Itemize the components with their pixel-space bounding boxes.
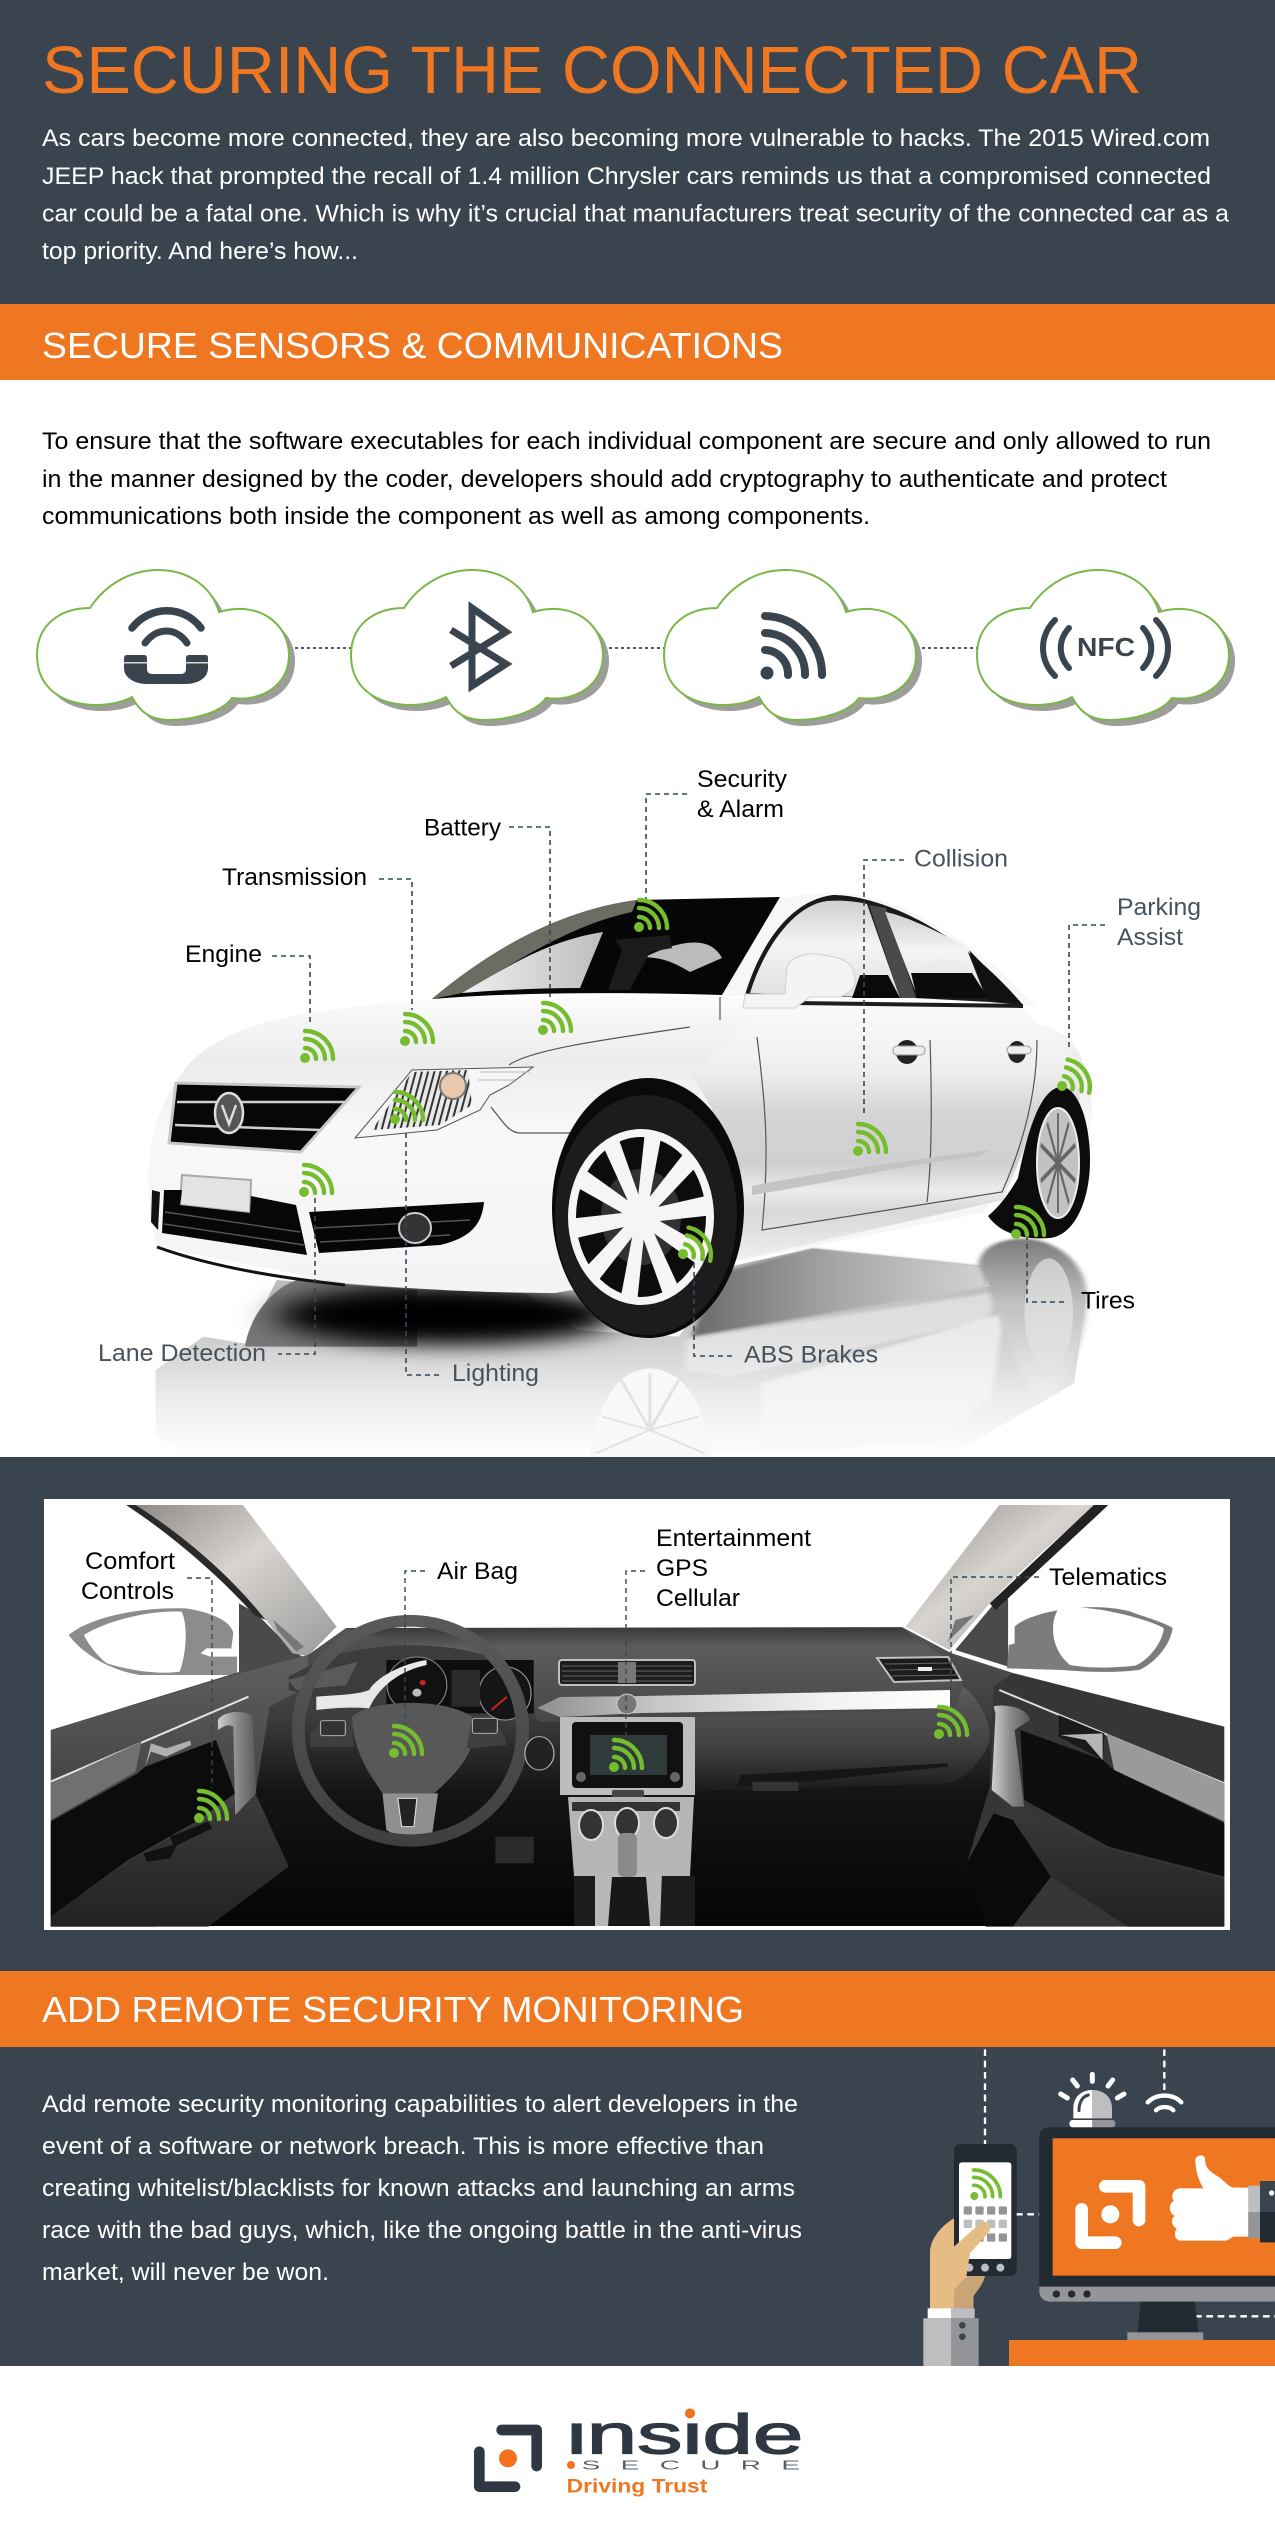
- car labels: Lighting: [452, 1360, 539, 1387]
- cloud: NFC: [977, 570, 1235, 726]
- front side window: [750, 901, 900, 998]
- icon: parking assist sensor: [1056, 1059, 1095, 1097]
- right vent: [877, 1657, 961, 1682]
- icon: battery sensor: [538, 1003, 571, 1035]
- center console: [560, 1717, 695, 1798]
- dashboard lower: [695, 1687, 990, 1792]
- right pillar and mirror: [906, 1505, 1173, 1672]
- icon: telematics sensor: [934, 1707, 967, 1739]
- cloud connectors: [289, 647, 977, 649]
- car labels: ABS Brakes: [744, 1342, 878, 1368]
- monitoring paragraph: Add remote security monitoring capabilities to alert developers in the: [42, 2091, 798, 2118]
- car labels: Lane Detection: [98, 1340, 266, 1367]
- grille: [169, 1083, 359, 1152]
- sensors paragraph: in the manner designed by the coder, developers should add cryptography to authenticate and protect: [42, 466, 1167, 493]
- car callouts: leader lines: [272, 794, 1105, 1375]
- left door: [51, 1655, 308, 1927]
- intro text block: top priority. And here’s how...: [42, 238, 358, 265]
- title: SECURING THE CONNECTED CAR: [42, 34, 1142, 108]
- dashed connections: [985, 2049, 1275, 2316]
- sensors paragraph: To ensure that the software executables for each individual component are secure and only allowed to run: [42, 428, 1211, 455]
- car labels: [98, 766, 1201, 1387]
- monitoring paragraph: [42, 2091, 802, 2286]
- lower grille right with fog light: [309, 1202, 484, 1253]
- illustration: remote monitoring: [923, 2049, 1275, 2366]
- car labels: Security: [697, 766, 787, 793]
- left pillar and mirror: [69, 1505, 337, 1677]
- center vent: [559, 1660, 695, 1685]
- car photo illustration: [148, 893, 1092, 1457]
- side window frame: [745, 895, 1023, 1005]
- interior labels: Cellular: [656, 1585, 740, 1612]
- interior labels: Comfort: [85, 1548, 175, 1575]
- window sill: [795, 1003, 1023, 1006]
- icon: telephone: [124, 611, 208, 684]
- number plate: [180, 1175, 251, 1213]
- door handles: [893, 1040, 1031, 1064]
- monitoring paragraph: market, will never be won.: [42, 2259, 329, 2286]
- rear side window: [885, 912, 986, 998]
- icon: security sensor: [634, 900, 667, 932]
- car labels: Transmission: [222, 864, 367, 891]
- side mirror: [743, 954, 855, 1008]
- section banner: secure sensors: SECURE SENSORS & COMMUNICATIONS: [42, 325, 783, 366]
- rear wheel: [988, 1087, 1090, 1238]
- monitor: [1039, 2127, 1275, 2340]
- headlight: [355, 1067, 533, 1138]
- interior labels: GPS: [656, 1555, 708, 1582]
- icon: alarm: [1061, 2074, 1124, 2127]
- car labels: & Alarm: [697, 796, 784, 823]
- header panel background: [0, 0, 1275, 304]
- car labels: Battery: [424, 814, 501, 842]
- desk: [1009, 2340, 1275, 2366]
- logo: Inside Secure: [479, 2402, 803, 2497]
- dark panel: remote monitoring: [0, 2047, 1275, 2366]
- icon: ABS sensor: [677, 1227, 716, 1265]
- icon: lighting sensor: [390, 1092, 423, 1124]
- cloud: bluetooth: [351, 570, 609, 726]
- hand and phone: [923, 2144, 1017, 2366]
- car labels: Assist: [1117, 924, 1183, 951]
- car labels: Tires: [1081, 1288, 1135, 1314]
- monitoring paragraph: event of a software or network breach. This is more effective than: [42, 2133, 764, 2160]
- lower console: [568, 1797, 695, 1926]
- logo mark: [479, 2430, 537, 2487]
- car labels: Engine: [185, 941, 262, 968]
- steering wheel and cluster: [288, 1615, 554, 1863]
- icon: tires sensor: [1011, 1207, 1044, 1239]
- right door: [967, 1673, 1224, 1927]
- icon: transmission sensor: [400, 1014, 433, 1046]
- rearview mirror: [608, 935, 672, 990]
- secure wordmark: SECURE: [582, 2458, 800, 2473]
- icon: engine sensor: [300, 1031, 333, 1063]
- sensors paragraph: [42, 428, 1211, 530]
- icon: wifi: [760, 616, 822, 680]
- car reflection: [156, 1238, 1087, 1457]
- icon: comfort controls sensor: [194, 1791, 227, 1823]
- section banner: secure sensors: [0, 304, 1275, 380]
- lower grille left: [162, 1190, 307, 1255]
- icon: NFC: NFC: [1077, 632, 1135, 662]
- interior labels: Air Bag: [437, 1558, 518, 1585]
- icon: bluetooth: [451, 608, 506, 686]
- intro text block: As cars become more connected, they are also becoming more vulnerable to hacks. The 2015 Wired.com: [42, 125, 1210, 152]
- cloud: wifi: [664, 570, 922, 726]
- cabin base: [51, 1627, 1224, 1926]
- icon: air bag sensor: [389, 1726, 422, 1758]
- interior photo frame: [44, 1499, 1230, 1930]
- intro text block: car could be a fatal one. Which is why it’s crucial that manufacturers treat security of the connected car as a: [42, 200, 1229, 228]
- side door shading: [690, 1007, 1080, 1262]
- car body: [148, 997, 1092, 1293]
- intro text block: JEEP hack that prompted the recall of 1.4 million Chrysler cars reminds us that a compromised connected: [42, 163, 1211, 190]
- section banner: remote monitoring: ADD REMOTE SECURITY MONITORING: [42, 1989, 744, 2030]
- door seams: [491, 997, 1037, 1230]
- center knob: [617, 1694, 637, 1714]
- section banner: remote monitoring: [0, 1971, 1275, 2047]
- interior labels: Telematics: [1049, 1564, 1167, 1591]
- sensors paragraph: communications both inside the component as well as among components.: [42, 503, 870, 530]
- wordmark: [566, 2402, 803, 2465]
- windshield: [432, 897, 780, 999]
- logo on screen: [1082, 2186, 1139, 2243]
- icon: entertainment sensor: [609, 1740, 642, 1772]
- cloud: phone: [37, 570, 295, 726]
- interior leader lines: [187, 1571, 1039, 1788]
- dark panel: interior section: [0, 1457, 1275, 1971]
- interior labels: Controls: [81, 1578, 174, 1605]
- quarter window: [969, 950, 1020, 1002]
- tagline: Driving Trust: [567, 2476, 708, 2497]
- icon: lane detection sensor: [299, 1165, 332, 1197]
- interior labels: [81, 1525, 1167, 1612]
- icon: thumbs up: [1170, 2155, 1275, 2242]
- car labels: Parking: [1117, 894, 1201, 921]
- roof and pillars: [720, 893, 1037, 1007]
- car interior illustration: [51, 1505, 1224, 1927]
- dashboard upper: [346, 1628, 965, 1722]
- bumper underline: [157, 1247, 345, 1285]
- b pillar: [869, 905, 916, 998]
- icon: NFC: [1043, 620, 1168, 676]
- wordmark: inside: [567, 2402, 803, 2465]
- car labels: Collision: [914, 846, 1008, 872]
- dash trim strip: [537, 1690, 950, 1717]
- monitoring paragraph: creating whitelist/blacklists for known attacks and launching an arms: [42, 2175, 795, 2202]
- front wheel: [552, 1078, 744, 1338]
- icon: collision sensor: [853, 1124, 886, 1156]
- monitoring paragraph: race with the bad guys, which, like the ongoing battle in the anti-virus: [42, 2217, 802, 2244]
- interior labels: Entertainment: [656, 1525, 811, 1552]
- windshield reflection: [432, 900, 722, 999]
- intro text block: [42, 125, 1229, 265]
- crease highlight: [752, 1150, 990, 1195]
- icon: signal: [1148, 2096, 1181, 2110]
